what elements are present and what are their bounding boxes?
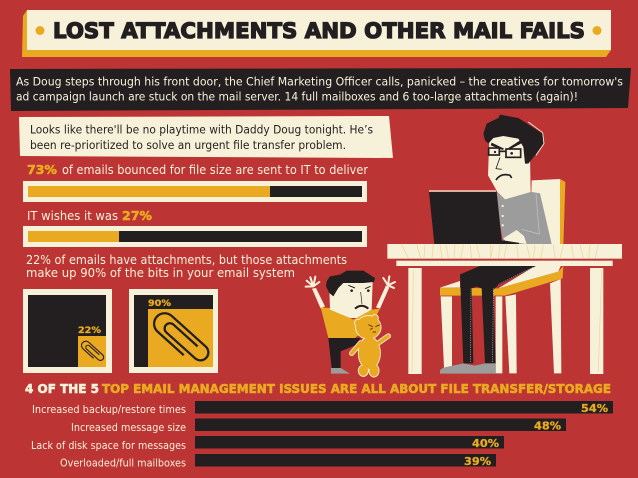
square chart 90%: 90% — [148, 299, 171, 309]
title banner: LOST ATTACHMENTS AND OTHER MAIL FAILS — [53, 19, 585, 43]
child arms — [306, 276, 395, 309]
bar: disk space: 40% — [472, 437, 499, 450]
narrative note: been re-prioritized to solve an urgent file transfer problem. — [30, 139, 346, 152]
attachments text — [26, 252, 347, 280]
bar: full mailboxes — [60, 454, 496, 470]
child pants and shoe — [328, 338, 361, 374]
progress bar 73% — [23, 181, 367, 202]
illustration: Doug at desk — [387, 115, 622, 374]
stat: 73% bounced: of emails bounced for file size are sent to IT to deliver — [62, 163, 368, 177]
narrative note: Looks like there'll be no playtime with Daddy Doug tonight. He’s — [30, 124, 373, 136]
attachments text: 22% of emails have attachments, but those attachments — [26, 252, 347, 267]
bar: message size: Increased message size — [71, 421, 186, 434]
square chart 22% — [23, 289, 112, 373]
title banner — [22, 10, 611, 57]
bar: disk space — [31, 436, 504, 452]
bar: message size: 48% — [534, 420, 561, 432]
shirt — [497, 192, 552, 244]
child shirt — [321, 307, 380, 338]
section heading: TOP EMAIL MANAGEMENT ISSUES ARE ALL ABOUT FILE TRANSFER/STORAGE — [102, 382, 611, 396]
bar: message size — [71, 418, 566, 434]
intro dark band — [10, 68, 631, 111]
narrative note — [19, 116, 393, 158]
desk — [387, 244, 622, 374]
chair seat, legs and Doug's legs — [440, 266, 563, 374]
attachments text: make up 90% of the bits in your email system — [26, 265, 295, 280]
bar: backup — [32, 401, 613, 416]
intro dark band: ad campaign launch are stuck on the mail server. 14 full mailboxes and 6 too-large attachments (again)! — [16, 90, 578, 104]
progress bar 27% — [23, 226, 367, 247]
square chart 22%: 22% — [78, 326, 101, 336]
square chart 90% — [129, 289, 218, 373]
laptop — [429, 191, 527, 244]
teddy bear — [352, 315, 388, 377]
head and hair — [483, 115, 544, 199]
bar: backup: 54% — [581, 402, 608, 415]
illustration: child with teddy — [306, 271, 395, 377]
bar: full mailboxes: 39% — [464, 455, 491, 468]
stat: IT wishes 27%: 27% — [122, 209, 152, 223]
section heading: 4 OF THE 5 — [25, 382, 99, 396]
child head — [326, 271, 375, 318]
intro dark band: As Doug steps through his front door, the Chief Marketing Officer calls, panicked – the creatives for tomorrow's — [16, 74, 623, 88]
bar: backup: Increased backup/restore times — [32, 403, 186, 416]
bar chart: email management issues — [31, 401, 613, 470]
bar: full mailboxes: Overloaded/full mailboxes — [60, 456, 186, 470]
bar: disk space: Lack of disk space for messages — [31, 439, 186, 452]
stat: 73% bounced: 73% — [27, 163, 57, 177]
chair back — [530, 179, 565, 247]
stat: IT wishes 27%: IT wishes it was — [27, 209, 118, 223]
